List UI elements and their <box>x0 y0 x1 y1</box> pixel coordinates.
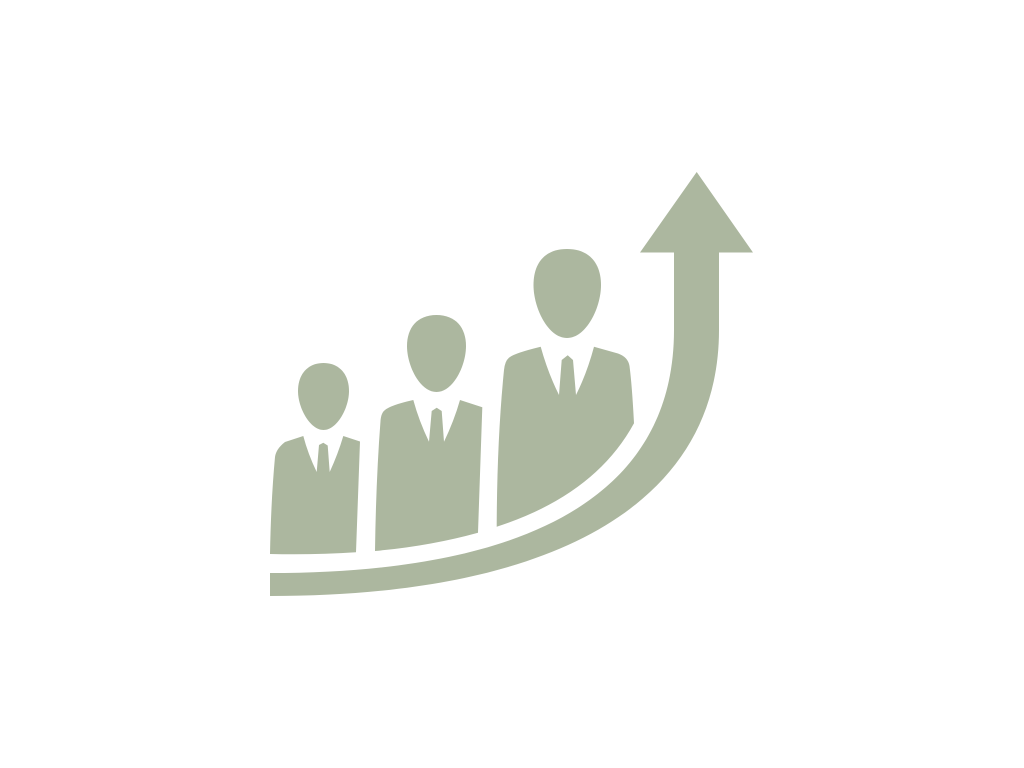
icon: large person <box>497 249 634 527</box>
arrow: rising growth curve <box>270 172 753 596</box>
icon: small person <box>270 363 360 554</box>
icon: medium person <box>375 315 482 551</box>
